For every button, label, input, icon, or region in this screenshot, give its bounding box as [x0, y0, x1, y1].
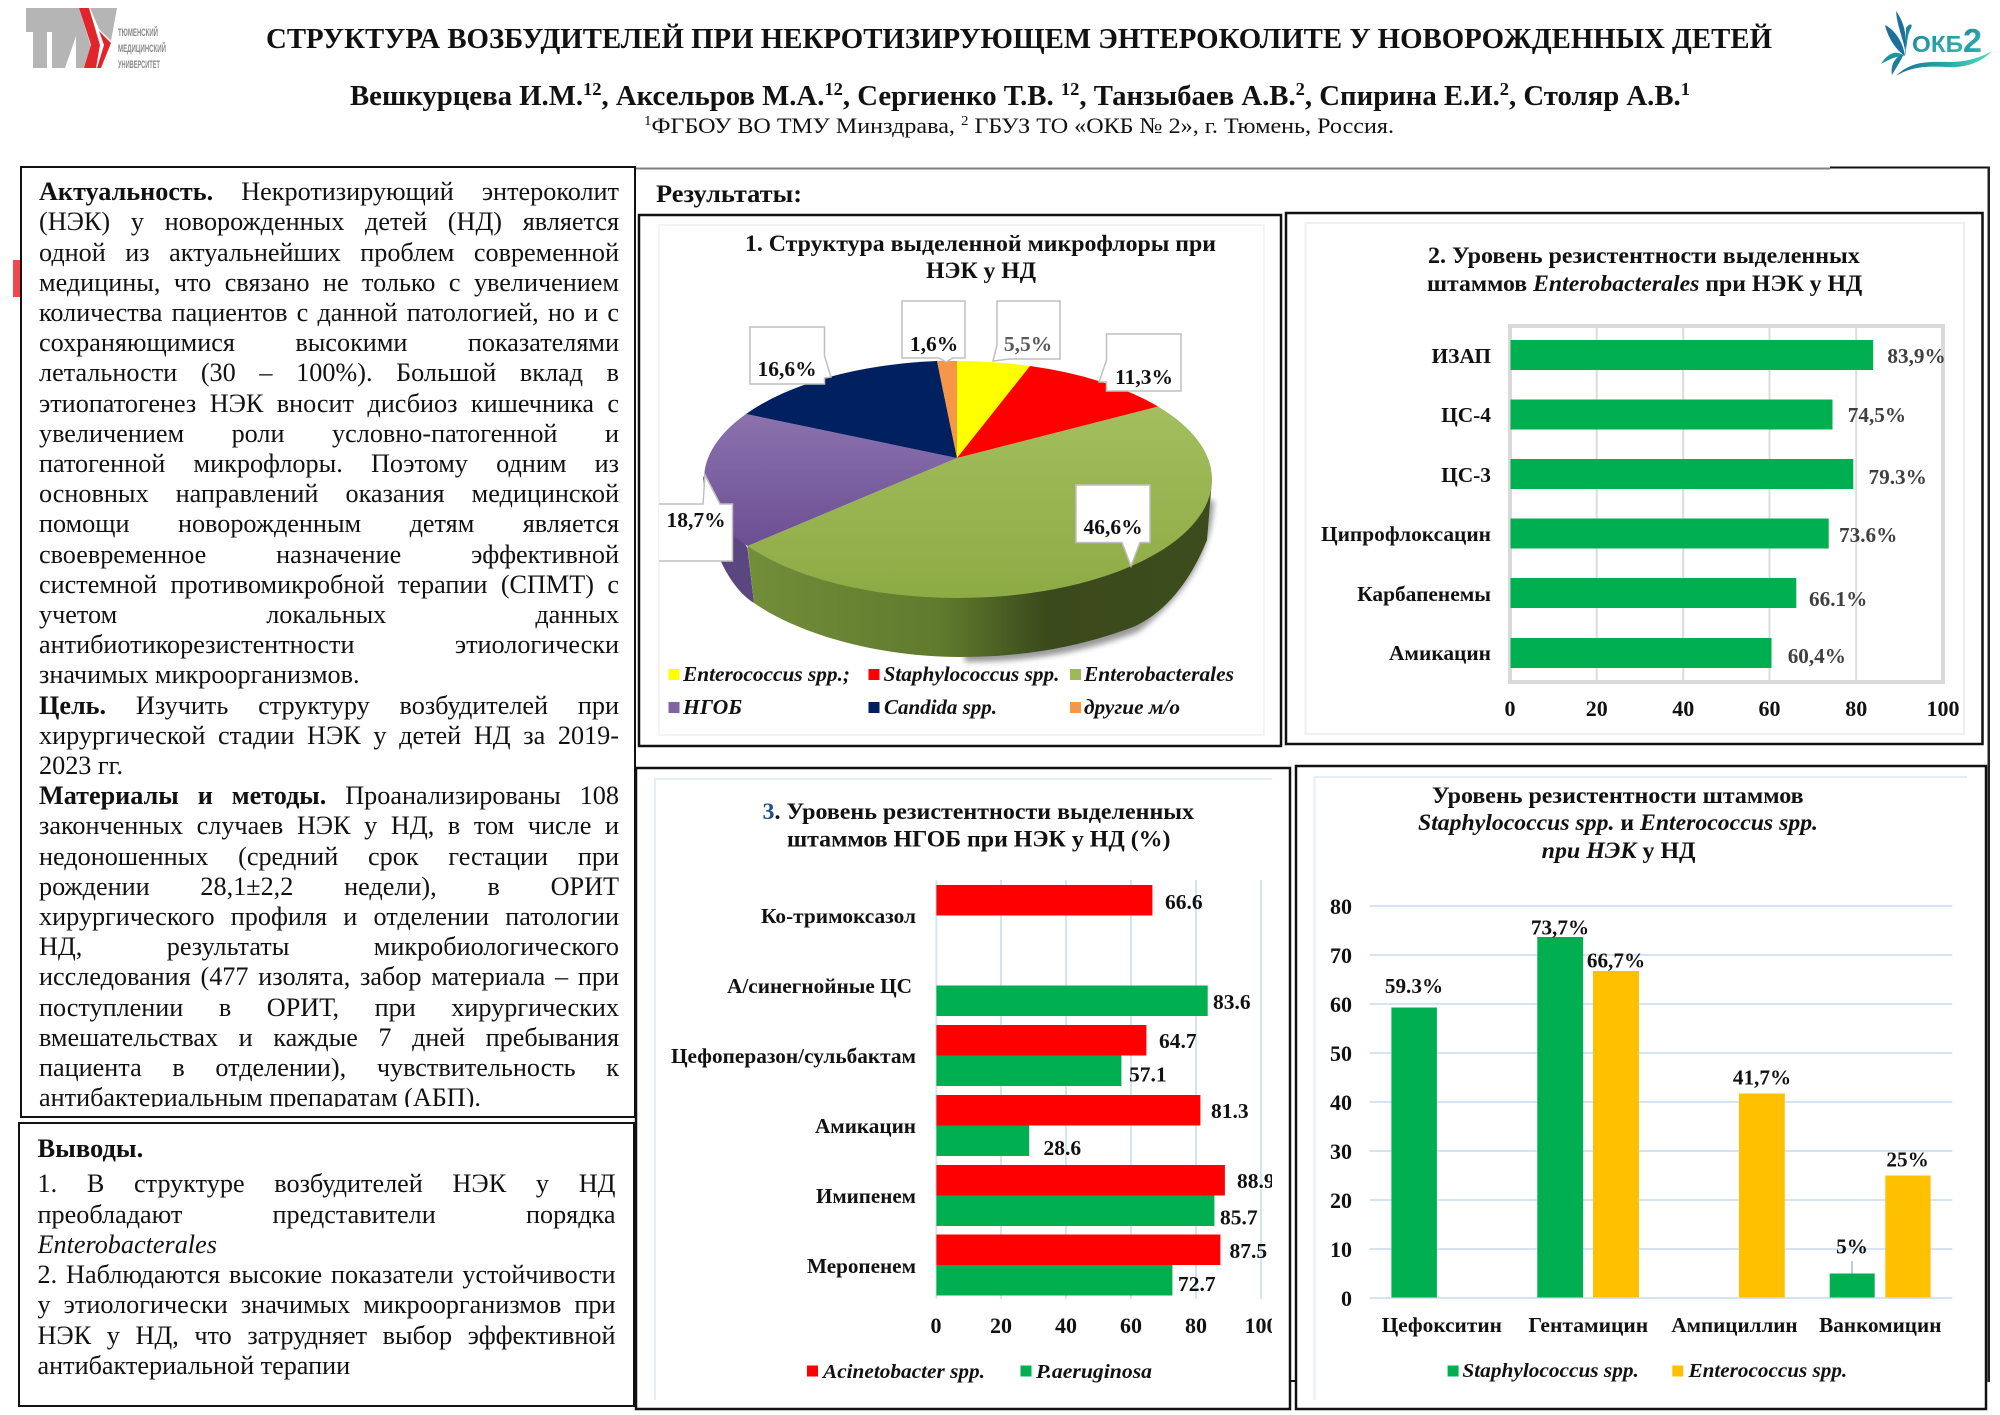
- value labels: 66.1%: [1809, 587, 1867, 611]
- panel: background, aim, methods: [20, 166, 636, 1118]
- gridlines: [1370, 906, 1952, 1298]
- value labels: [1385, 916, 1929, 1258]
- callout: 5,5%: 5,5%: [1004, 332, 1052, 356]
- value labels: 66.6: [1165, 890, 1203, 914]
- text block: conclusions list: Enterobacterales: [38, 1230, 217, 1259]
- category labels: Ванкомицин: [1819, 1313, 1941, 1337]
- value labels: 83.6: [1213, 990, 1251, 1014]
- pie legend: [668, 662, 1234, 719]
- category labels: [671, 904, 916, 1278]
- category labels: Имипенем: [816, 1184, 916, 1208]
- value labels: [1044, 890, 1275, 1296]
- text block: introduction, aim, materials and methods: сохраняющимися высокими показателями: [39, 328, 619, 357]
- y axis labels: 50: [1330, 1041, 1352, 1066]
- text block: introduction, aim, materials and methods: рождении 28,1±2,2 недели), в ОРИТ: [39, 872, 619, 901]
- category labels: Цефокситин: [1382, 1313, 1502, 1337]
- affiliations: 1: [644, 114, 652, 129]
- callout: 5,5%: [993, 301, 1060, 361]
- category labels: Ципрофлоксацин: [1321, 522, 1491, 546]
- authors: , Сергиенко Т.В.: [843, 81, 1061, 112]
- text block: conclusions list: 2. Наблюдаются высокие показатели устойчивости: [38, 1260, 616, 1289]
- callout: 1,6%: [902, 301, 965, 362]
- text block: introduction, aim, materials and methods: помощи новорожденным детям является: [39, 509, 619, 538]
- value labels: 73,7%: [1531, 916, 1589, 940]
- y axis labels: 30: [1330, 1139, 1352, 1164]
- chart 1: pie of isolated microflora: [639, 215, 1281, 746]
- x axis labels: 0: [930, 1313, 942, 1338]
- chart title: 1. Структура выделенной микрофлоры при: [745, 231, 1216, 256]
- text block: introduction, aim, materials and methods: законченных случаев НЭК у НД, в том числе и: [39, 811, 619, 840]
- value labels: 85.7: [1220, 1206, 1258, 1230]
- text block: introduction, aim, materials and methods: учетом локальных данных: [39, 600, 619, 629]
- category labels: Меропенем: [807, 1254, 916, 1278]
- y axis labels: 0: [1341, 1286, 1352, 1311]
- y axis labels: 80: [1330, 894, 1352, 919]
- red bars: Acinetobacter: [936, 885, 1225, 1265]
- x axis labels: 20: [1586, 696, 1608, 721]
- text block: conclusions list: антибактериальной терапии: [38, 1351, 350, 1380]
- text block: introduction, aim, materials and methods: летальности (30 – 100%). Большой вклад в: [39, 358, 619, 387]
- x axis labels: 40: [1672, 696, 1694, 721]
- pie legend: Staphylococcus spp.: [884, 662, 1060, 686]
- text block: introduction, aim, materials and methods: патогенной микрофлоры. Поэтому одним из: [39, 449, 619, 478]
- callout: 46,6%: 46,6%: [1083, 515, 1143, 539]
- chart 4: Staphylococcus and Enterococcus resistance: [1296, 766, 1986, 1409]
- category labels: Гентамицин: [1528, 1313, 1648, 1337]
- logo: OKB 2: [1881, 11, 1992, 76]
- value labels: 59.3%: [1385, 974, 1443, 998]
- heading: results: Результаты:: [656, 179, 802, 208]
- value labels: 66,7%: [1587, 948, 1645, 972]
- category labels: [1382, 1313, 1941, 1337]
- authors: , Аксельров М.А.: [602, 81, 824, 112]
- x axis labels: 40: [1055, 1313, 1077, 1338]
- text block: introduction, aim, materials and methods: медицины, что связано не только с увеличением: [39, 268, 619, 297]
- callout: 16,6%: 16,6%: [757, 357, 817, 381]
- text block: introduction, aim, materials and methods: недоношенных (средний срок гестации при: [39, 842, 619, 871]
- leader line: [1851, 1261, 1853, 1274]
- callout: 1,6%: 1,6%: [910, 332, 958, 356]
- text block: conclusions list: 1. В структуре возбудителей НЭК у НД: [38, 1169, 616, 1198]
- chart title: Уровень резистентности штаммов: [1432, 783, 1804, 808]
- category labels: Амикацин: [815, 1114, 916, 1138]
- value labels: 41,7%: [1733, 1066, 1791, 1090]
- callout: 11,3%: 11,3%: [1115, 365, 1173, 389]
- category labels: А/синегнойные ЦС: [727, 974, 912, 998]
- y axis labels: 60: [1330, 992, 1352, 1017]
- affiliations: 2: [961, 114, 968, 129]
- callout: 16,6%: [750, 327, 831, 384]
- authors: Вешкурцева И.М.: [350, 81, 577, 112]
- x axis labels: 20: [990, 1313, 1012, 1338]
- plot frame and grid: [1510, 326, 1943, 682]
- gridlines: [936, 880, 1261, 1299]
- green bars: Staphylococcus: [1391, 937, 1875, 1298]
- authors: 1: [1681, 79, 1690, 99]
- text block: introduction, aim, materials and methods: Актуальность. Некротизирующий энтероколит: [39, 177, 619, 206]
- legend: [1448, 1360, 1847, 1382]
- value labels: 28.6: [1044, 1136, 1081, 1160]
- chart title: 2. Уровень резистентности выделенных: [1428, 243, 1860, 268]
- text block: introduction, aim, materials and methods: одной из актуальнейших проблем современной: [39, 238, 619, 266]
- text block: introduction, aim, materials and methods: увеличением роли условно-патогенной и: [39, 419, 619, 448]
- y axis labels: 40: [1330, 1090, 1352, 1115]
- value labels: 79.3%: [1868, 465, 1927, 489]
- category labels: Ко-тримоксазол: [761, 904, 916, 928]
- pie legend: Enterobacterales: [1083, 662, 1234, 686]
- pie top face: [704, 361, 1212, 598]
- logo: Tyumen Medical University: УНИВЕРСИТЕТ: [118, 59, 160, 71]
- y axis labels: 70: [1330, 943, 1352, 968]
- pie legend: НГОБ: [682, 695, 742, 719]
- authors: 2: [1500, 79, 1509, 99]
- authors: 2: [1296, 79, 1305, 99]
- category labels: Цефоперазон/сульбактам: [671, 1044, 916, 1068]
- value labels: 5%: [1836, 1234, 1868, 1258]
- text block: introduction, aim, materials and methods: Цель. Изучить структуру возбудителей при: [39, 691, 619, 720]
- text block: introduction, aim, materials and methods: своевременное назначение эффективной: [39, 540, 619, 569]
- text block: introduction, aim, materials and methods: антибиотикорезистентности этиологически: [39, 630, 619, 659]
- chart 3: gram-negative non-fermenting resistance: [636, 768, 1290, 1409]
- value labels: 87.5: [1230, 1239, 1267, 1263]
- callout: 18,7%: 18,7%: [666, 508, 726, 532]
- green bars: P. aeruginosa: [936, 986, 1214, 1296]
- panel: conclusions: [18, 1122, 635, 1407]
- authors: , Танзыбаев А.В.: [1079, 81, 1296, 112]
- title: СТРУКТУРА ВОЗБУДИТЕЛЕЙ ПРИ НЕКРОТИЗИРУЮЩЕМ ЭНТЕРОКОЛИТЕ У НОВОРОЖДЕННЫХ ДЕТЕЙ: [266, 22, 1772, 55]
- x axis labels: 60: [1120, 1313, 1142, 1338]
- pie shadow: [960, 500, 1214, 662]
- x axis labels: 80: [1185, 1313, 1207, 1338]
- value labels: 72.7: [1178, 1272, 1216, 1296]
- text block: introduction, aim, materials and methods: основных направлений оказания медицинской: [39, 479, 619, 508]
- value labels: [1788, 344, 1946, 668]
- yellow bars: Enterococcus: [1593, 971, 1931, 1298]
- x axis labels: 60: [1758, 696, 1780, 721]
- logo: OKB 2: ОКБ: [1912, 31, 1963, 57]
- authors: , Спирина Е.И.: [1305, 81, 1500, 112]
- authors: 12: [583, 79, 602, 99]
- text block: introduction, aim, materials and methods: значимых микроорганизмов.: [39, 660, 360, 689]
- value labels: 57.1: [1129, 1062, 1167, 1086]
- category labels: ИЗАП: [1432, 344, 1491, 368]
- text block: introduction, aim, materials and methods: исследования (477 изолята, забор материала – при: [39, 962, 619, 991]
- category labels: [1321, 344, 1491, 665]
- text block: introduction, aim, materials and methods: 2023 гг.: [39, 751, 123, 780]
- legend: Acinetobacter spp.: [821, 1361, 985, 1383]
- category labels: ЦС-3: [1441, 463, 1491, 487]
- value labels: 81.3: [1211, 1099, 1249, 1123]
- chart title: штаммов НГОБ при НЭК у НД (%): [787, 826, 1170, 852]
- chart title: штаммов Enterobacterales при НЭК у НД: [1427, 271, 1857, 296]
- text block: conclusions list: преобладают представители порядка: [38, 1200, 616, 1229]
- pie legend: другие м/о: [1084, 695, 1180, 719]
- x axis labels: 0: [1504, 696, 1516, 721]
- callout: 46,6%: [1076, 485, 1150, 566]
- text block: introduction, aim, materials and methods: Материалы и методы. Проанализированы 108: [39, 781, 619, 810]
- authors: , Столяр А.В.: [1509, 81, 1681, 112]
- value labels: 83,9%: [1887, 344, 1946, 368]
- chart title: НЭК у НД: [926, 258, 1036, 283]
- logo: Tyumen Medical University: ТЮМЕНСКИЙ: [118, 26, 158, 39]
- heading: conclusions: Выводы.: [38, 1133, 143, 1163]
- chart title: Staphylococcus spp. и Enterococcus spp.: [1418, 810, 1813, 835]
- x axis labels: 100: [1926, 696, 1960, 721]
- legend: P.aeruginosa: [1035, 1361, 1152, 1383]
- authors: 12: [824, 79, 843, 99]
- chart title: при НЭК у НД: [1542, 838, 1693, 863]
- text block: introduction, aim, materials and methods: НД, результаты микробиологического: [39, 932, 619, 961]
- x axis labels: [1504, 696, 1960, 721]
- text block: introduction, aim, materials and methods: количества пациентов с данной патологией, но и с: [39, 298, 619, 327]
- text block: introduction, aim, materials and methods: пациента в отделении), чувствительность к: [39, 1053, 619, 1082]
- callout: 18,7%: [659, 475, 732, 561]
- category labels: ЦС-4: [1441, 403, 1491, 427]
- text block: introduction, aim, materials and methods: [39, 177, 619, 1107]
- y axis labels: 20: [1330, 1188, 1352, 1213]
- category labels: Карбапенемы: [1357, 582, 1491, 606]
- bars: [1510, 340, 1873, 668]
- text block: introduction, aim, materials and methods: поступлении в ОРИТ, при хирургических: [39, 993, 619, 1022]
- text block: introduction, aim, materials and methods: этиопатогенез НЭК вносит дисбиоз кишечника с: [39, 389, 619, 418]
- value labels: 60,4%: [1788, 644, 1846, 668]
- text block: introduction, aim, materials and methods: хирургического профиля и отделении патологии: [39, 902, 619, 931]
- red edge mark: [13, 260, 20, 297]
- value labels: 25%: [1886, 1148, 1929, 1172]
- logo: OKB 2: 2: [1963, 22, 1982, 59]
- pie legend: Candida spp.: [884, 695, 997, 719]
- text block: conclusions list: НЭК у НД, что затрудняет выбор эффективной: [38, 1321, 616, 1350]
- text block: introduction, aim, materials and methods: вмешательствах и каждые 7 дней пребывания: [39, 1023, 619, 1052]
- category labels: Ампициллин: [1671, 1313, 1798, 1337]
- legend: Enterococcus spp.: [1687, 1360, 1847, 1382]
- legend: [807, 1361, 1152, 1383]
- value labels: 64.7: [1159, 1029, 1197, 1053]
- y axis labels: 10: [1330, 1237, 1352, 1262]
- chart title: 3. Уровень резистентности выделенных: [762, 799, 1177, 824]
- callout: 11,3%: [1099, 334, 1181, 391]
- value labels: 74,5%: [1848, 403, 1906, 427]
- logo: Tyumen Medical University: [26, 8, 166, 71]
- text block: introduction, aim, materials and methods: системной противомикробной терапии (СПМТ) с: [39, 570, 619, 599]
- x axis labels: [931, 1318, 1272, 1333]
- affiliations: ФГБОУ ВО ТМУ Минздрава,: [652, 113, 961, 138]
- value labels: 88.9: [1237, 1169, 1275, 1193]
- x axis labels: 100: [1244, 1313, 1278, 1338]
- x axis labels: 80: [1845, 696, 1867, 721]
- logo: Tyumen Medical University: МЕДИЦИНСКИЙ: [118, 42, 166, 55]
- y axis labels: [1330, 894, 1352, 1311]
- text block: introduction, aim, materials and methods: (НЭК) у новорожденных детей (НД) является: [39, 207, 619, 236]
- pie side walls: [703, 476, 1212, 657]
- text block: introduction, aim, materials and methods: хирургической стадии НЭК у детей НД за 2019-: [39, 721, 619, 750]
- value labels: 73.6%: [1839, 523, 1897, 547]
- affiliations: ГБУЗ ТО «ОКБ № 2», г. Тюмень, Россия.: [968, 113, 1394, 138]
- category labels: Амикацин: [1389, 641, 1491, 665]
- pie legend: Enterococcus spp.;: [682, 662, 850, 686]
- legend: Staphylococcus spp.: [1462, 1360, 1639, 1382]
- chart 2: Enterobacterales resistance: [1286, 213, 1982, 744]
- authors: 12: [1061, 79, 1079, 99]
- text block: conclusions list: у этиологически значимых микроорганизмов при: [38, 1290, 616, 1319]
- text block: conclusions list: [38, 1169, 616, 1380]
